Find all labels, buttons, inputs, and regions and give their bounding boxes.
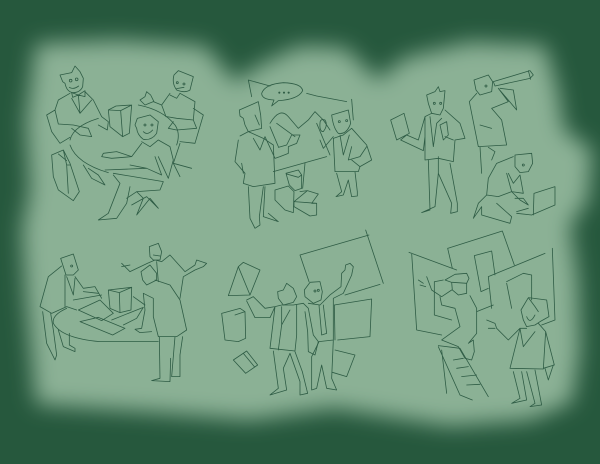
man with telescope (469, 71, 533, 173)
standing man with book (391, 87, 465, 213)
light green blurred panel (22, 40, 592, 426)
scene 2: two men with presentation board (235, 80, 372, 228)
woman with long tie (304, 263, 353, 390)
shopping bag (52, 150, 79, 201)
box on table (108, 105, 132, 137)
scene 5: two people with floating frames (222, 230, 383, 395)
scene 4: men around table with papers (40, 243, 207, 382)
speech bubble with dots (262, 83, 303, 106)
right man with folder (320, 110, 372, 197)
kneeling man with laptop (473, 153, 555, 223)
man in front (98, 115, 173, 220)
stepladder (438, 346, 488, 400)
cardboard boxes (275, 170, 318, 216)
man in suit, arm raised (247, 283, 318, 395)
scene 6: man on ladder and woman pointing (409, 231, 555, 407)
left man in profile (235, 102, 300, 228)
wall frames (409, 231, 555, 335)
man on the right (140, 71, 203, 177)
scene 3: man with book, telescope, laptop (391, 71, 555, 223)
woman pointing (487, 298, 554, 407)
round table (70, 105, 178, 173)
scene 1: meeting at round table (47, 66, 203, 220)
man with open arms (122, 243, 207, 298)
background frames (300, 230, 383, 377)
floating sheets and boxes (222, 262, 260, 373)
man on the left (47, 66, 108, 185)
man from behind (135, 265, 187, 382)
presentation board (248, 80, 353, 188)
table with papers and box (53, 287, 158, 342)
man on ladder (418, 273, 477, 360)
leaning man with square head (40, 254, 102, 360)
